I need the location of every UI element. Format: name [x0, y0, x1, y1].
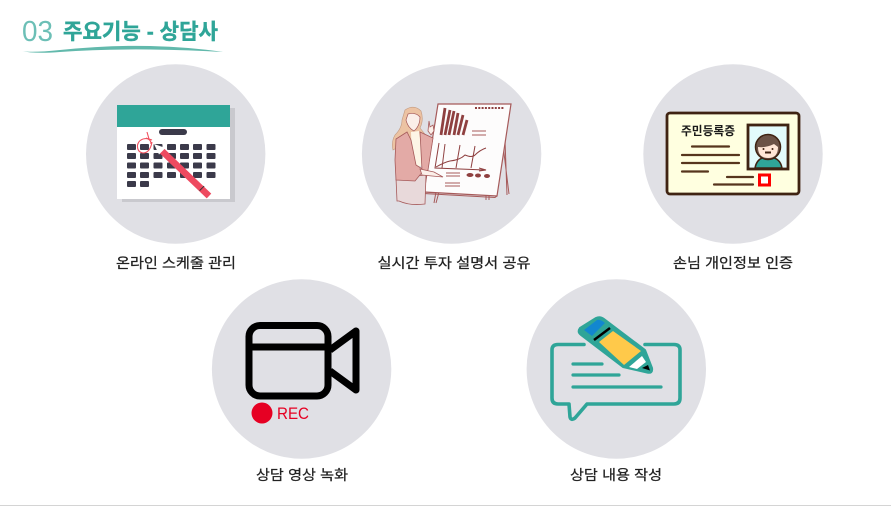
title: 03	[22, 16, 53, 48]
icon: ID card: 주민등록증	[681, 124, 735, 138]
circle background	[86, 64, 265, 244]
panel: live investment presentation sharing	[362, 64, 541, 271]
title: 주요기능 - 상담사	[63, 20, 218, 44]
icon: recording indicator: REC	[277, 404, 309, 423]
label: 온라인 스케줄 관리	[116, 255, 236, 271]
title	[21, 16, 223, 53]
label: 상담 내용 작성	[570, 467, 662, 483]
icon: speech bubble with pencil	[552, 317, 680, 419]
circle background	[527, 279, 706, 459]
panel: consultation video recording	[212, 279, 391, 483]
label: 상담 영상 녹화	[256, 467, 348, 483]
label: 실시간 투자 설명서 공유	[378, 255, 531, 271]
icon: calendar	[117, 105, 235, 202]
icon: recording indicator	[252, 402, 309, 424]
panel: schedule management	[86, 64, 265, 271]
circle background	[643, 64, 823, 244]
circle background	[362, 64, 541, 244]
icon: video camera	[249, 326, 356, 396]
circle background	[212, 279, 391, 459]
label: 손님 개인정보 인증	[673, 255, 793, 271]
panel: consultation notes	[527, 279, 706, 483]
panel: customer identity verification	[643, 64, 823, 271]
icon: presenter at flip chart	[392, 104, 511, 205]
icon: ID card	[667, 113, 799, 194]
